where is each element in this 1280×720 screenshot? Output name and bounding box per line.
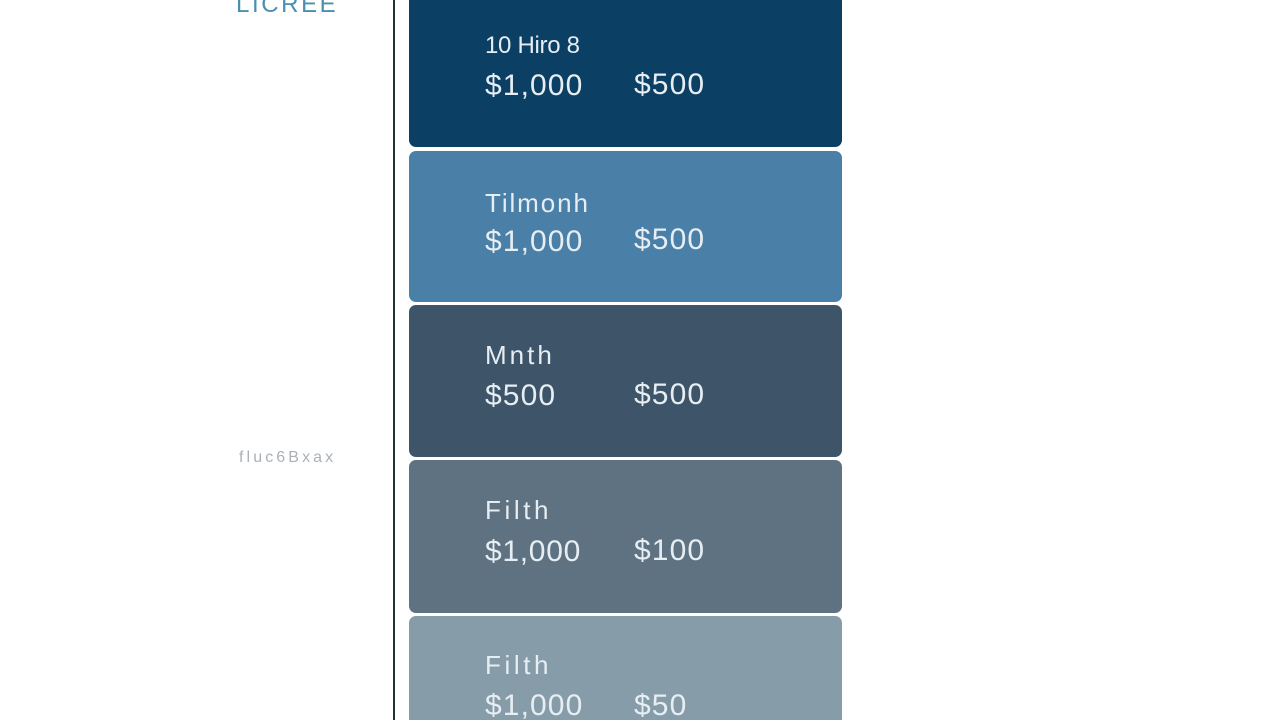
card: third tier <box>409 305 842 457</box>
tier name: Filth <box>485 495 552 525</box>
card: fourth tier <box>409 460 842 613</box>
vertical axis line <box>393 0 395 720</box>
card: second tier <box>409 151 842 302</box>
amount left: $1,000 <box>485 69 583 102</box>
amount right: $500 <box>634 378 705 411</box>
amount left: $1,000 <box>485 535 581 568</box>
tier name: Mnth <box>485 340 555 370</box>
amount right: $100 <box>634 534 705 567</box>
card: first tier <box>409 0 842 147</box>
tier name: Filth <box>485 650 552 680</box>
amount left: $1,000 <box>485 225 583 258</box>
card: fifth tier <box>409 616 842 720</box>
side label: fluc6Bxax <box>239 449 336 466</box>
amount right: $500 <box>634 68 705 101</box>
tier name: Tilmonh <box>485 188 590 218</box>
amount right: $500 <box>634 223 705 256</box>
amount left: $500 <box>485 379 556 412</box>
tier name: 10 Hiro 8 <box>485 32 580 59</box>
